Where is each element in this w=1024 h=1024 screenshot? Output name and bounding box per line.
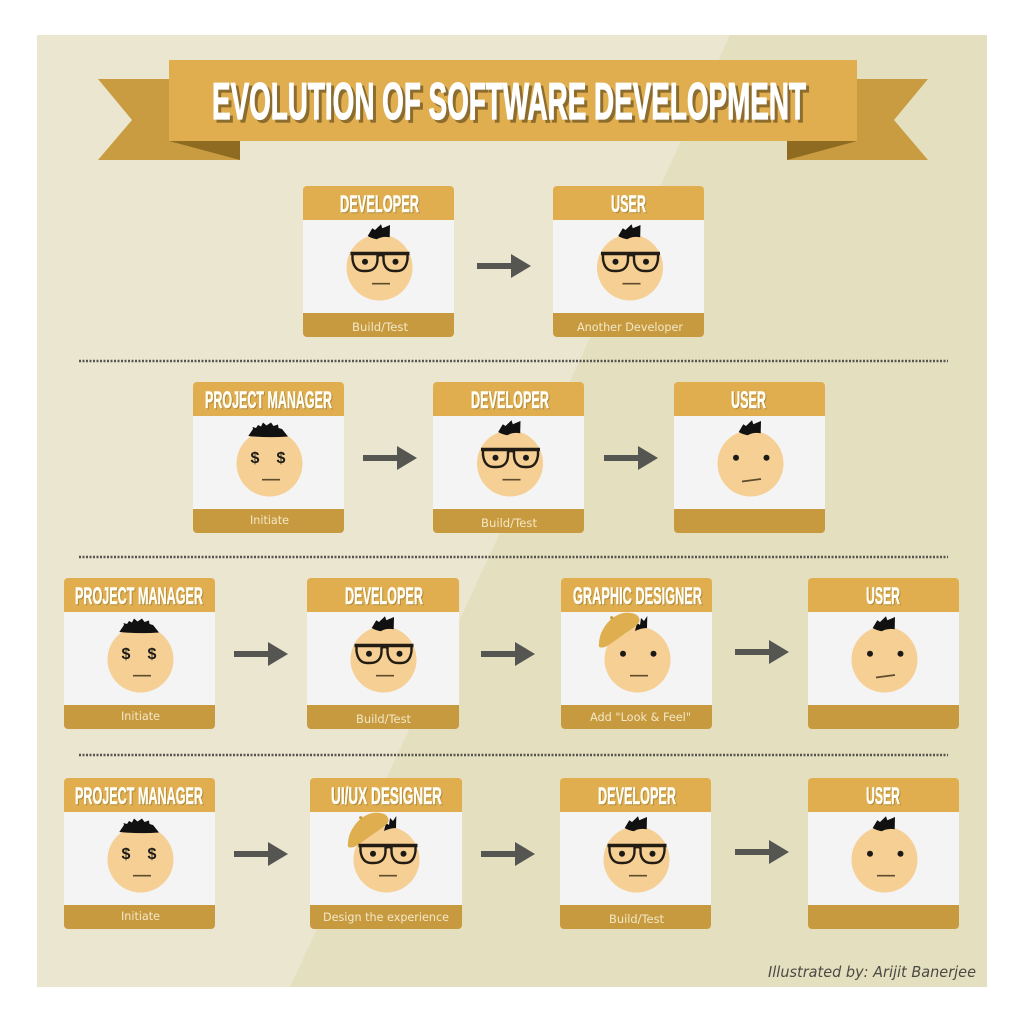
row 3 xyxy=(64,578,959,729)
card: project manager: PROJECT MANAGER xyxy=(75,783,203,810)
icon: user face xyxy=(852,616,918,692)
icon: developer face xyxy=(350,616,416,692)
card: user, another developer: USER xyxy=(611,191,646,218)
card: developer xyxy=(433,382,584,533)
row 1 xyxy=(303,186,704,337)
card: user xyxy=(808,778,959,929)
icon: user face with glasses xyxy=(597,224,663,300)
card: developer xyxy=(307,578,459,729)
icon: user face xyxy=(852,816,918,892)
icon: project manager face xyxy=(108,818,174,892)
card: user: USER xyxy=(731,387,766,414)
card: developer: Build/Test xyxy=(609,912,664,926)
card: project manager xyxy=(193,382,344,533)
card: ui/ux designer xyxy=(310,778,462,929)
card: project manager xyxy=(64,778,215,929)
card: user xyxy=(674,382,825,533)
arrow xyxy=(735,640,789,664)
card: project manager: PROJECT MANAGER xyxy=(75,583,203,610)
card: developer: Build/Test xyxy=(356,712,411,726)
icon: project manager face: $ xyxy=(122,846,131,863)
icon: project manager face: $ xyxy=(148,646,157,663)
icon: developer face xyxy=(346,224,412,300)
card: project manager: PROJECT MANAGER xyxy=(205,387,332,414)
card: user, another developer xyxy=(553,186,704,337)
row 2 divider xyxy=(79,556,948,558)
row 1 divider xyxy=(79,360,948,362)
card: developer: DEVELOPER xyxy=(598,783,676,810)
icon: project manager face: $ xyxy=(148,846,157,863)
arrow xyxy=(481,642,535,666)
arrow xyxy=(481,842,535,866)
card: user, another developer: Another Developer xyxy=(577,320,683,334)
row 4 xyxy=(64,778,959,929)
title ribbon xyxy=(98,60,928,160)
arrow xyxy=(234,642,288,666)
card: project manager: Initiate xyxy=(250,513,289,527)
credit: Illustrated by: Arijit Banerjee xyxy=(768,963,976,981)
card: graphic designer: Add "Look & Feel" xyxy=(590,710,691,724)
card: project manager xyxy=(64,578,215,729)
card: developer: Build/Test xyxy=(481,516,537,530)
icon: project manager face: $ xyxy=(277,450,286,467)
card: graphic designer xyxy=(561,578,712,729)
card: developer: Build/Test xyxy=(352,320,408,334)
card: graphic designer: GRAPHIC DESIGNER xyxy=(573,583,702,610)
icon: project manager face xyxy=(108,618,174,692)
card: ui/ux designer: Design the experience xyxy=(323,910,449,924)
card: developer: DEVELOPER xyxy=(345,583,423,610)
card: developer: DEVELOPER xyxy=(471,387,549,414)
card: project manager: Initiate xyxy=(121,709,160,723)
icon: designer face with beret and glasses xyxy=(348,813,420,892)
icon: project manager face xyxy=(236,422,302,496)
card: user: USER xyxy=(866,783,900,810)
icon: user face xyxy=(718,420,784,496)
card: developer xyxy=(303,186,454,337)
card: developer: DEVELOPER xyxy=(340,191,419,218)
card: user: USER xyxy=(866,583,900,610)
arrow xyxy=(363,446,417,470)
icon: developer face xyxy=(477,420,543,496)
arrow xyxy=(234,842,288,866)
icon: project manager face: $ xyxy=(251,450,260,467)
arrow xyxy=(604,446,658,470)
card: ui/ux designer: UI/UX DESIGNER xyxy=(331,783,442,810)
card: user xyxy=(808,578,959,729)
arrow xyxy=(477,254,531,278)
icon: developer face xyxy=(604,816,670,892)
icon: designer face with beret xyxy=(599,613,670,692)
row 2 xyxy=(193,382,825,533)
icon: project manager face: $ xyxy=(122,646,131,663)
card: project manager: Initiate xyxy=(121,909,160,923)
arrow xyxy=(735,840,789,864)
row 3 divider xyxy=(79,754,948,756)
card: developer xyxy=(560,778,711,929)
